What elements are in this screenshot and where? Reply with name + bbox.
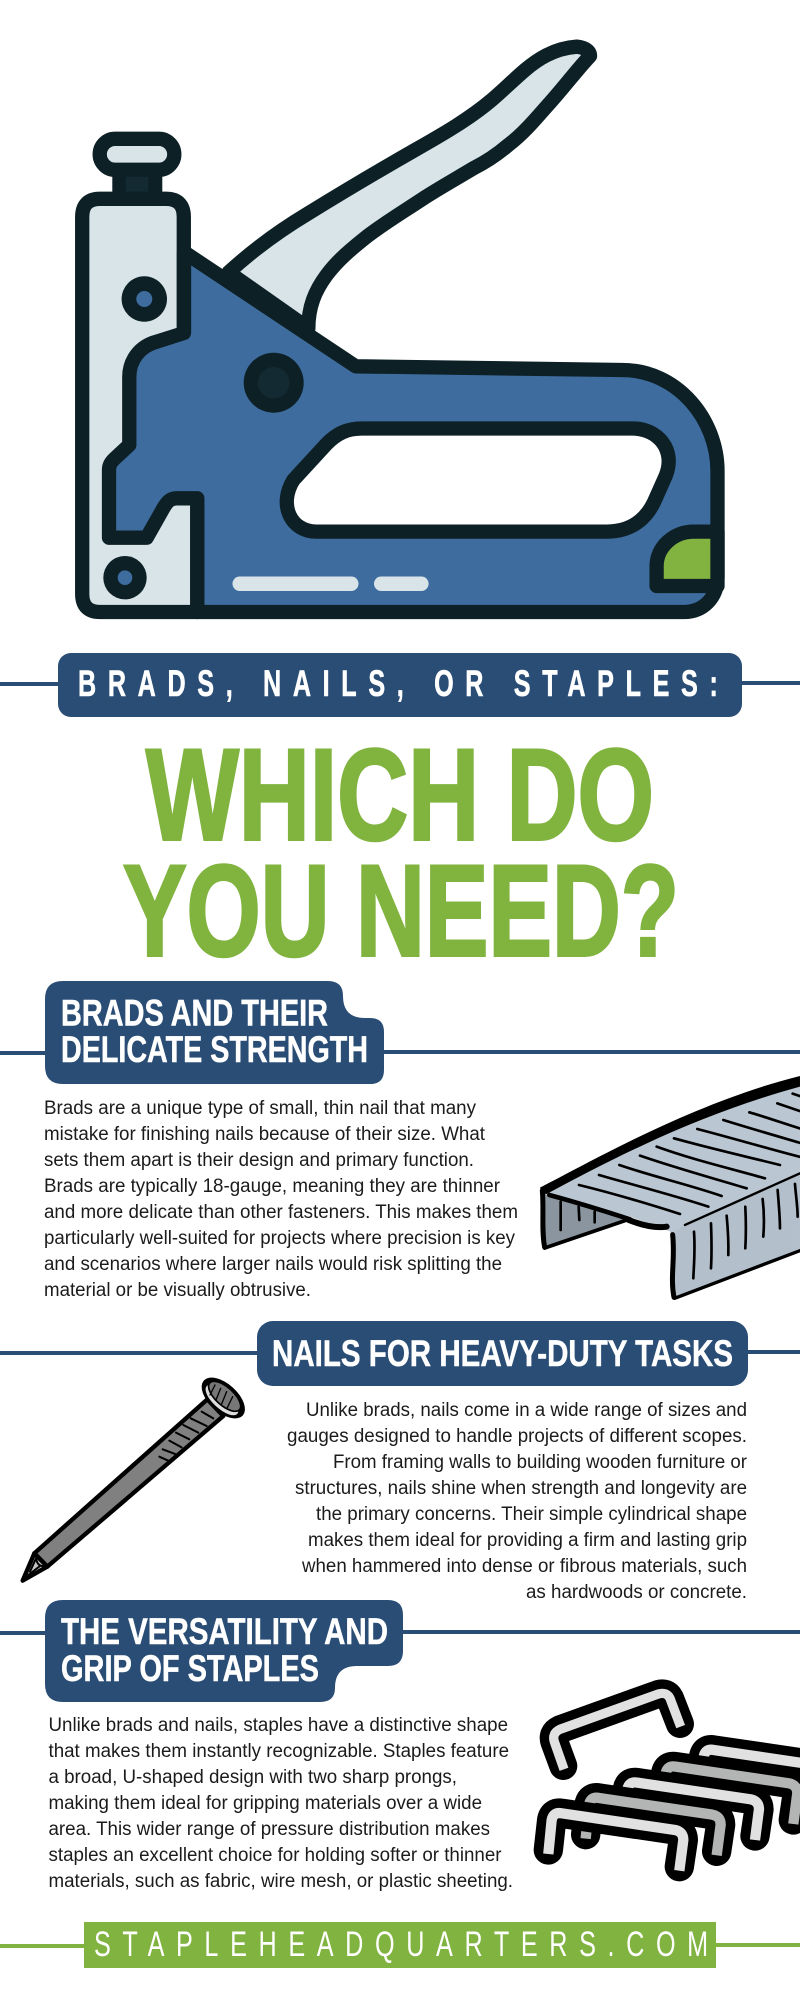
staples body text: Unlike brads and nails, staples have a distinctive shape [48,1715,508,1736]
nails heading [257,1321,748,1386]
nails body text: structures, nails shine when strength and longevity are [295,1478,747,1499]
staples body text: materials, such as fabric, wire mesh, or plastic sheeting. [48,1871,513,1892]
panel: brads [0,981,800,1301]
nails body text: makes them ideal for providing a firm and lasting grip [308,1530,747,1551]
brads body text: Brads are a unique type of small, thin nail that many [44,1098,476,1119]
stapler highlight pills [232,576,429,591]
panel: nails [0,1321,800,1603]
nails body text: gauges designed to handle projects of different scopes. [287,1426,747,1447]
stapler blue body [109,252,718,612]
staples body text [48,1715,513,1892]
title: WHICH DO [146,722,654,868]
banner: subtitle [0,653,800,717]
brads body text: mistake for finishing nails because of their size. What [44,1124,486,1145]
brads body text: sets them apart is their design and primary function. [44,1150,474,1171]
brads body text: Brads are typically 18-gauge, meaning they are thinner [44,1176,501,1197]
website text: STAPLEHEADQUARTERS.COM [94,1925,708,1964]
staples heading: GRIP OF STAPLES [61,1648,319,1689]
staples body text: a broad, U-shaped design with two sharp prongs, [48,1767,457,1788]
brads body text: and more delicate than other fasteners. This makes them [44,1202,518,1223]
brads heading: BRADS AND THEIR [61,992,328,1034]
stapler pivot [244,353,304,413]
row of staples [548,1750,800,1871]
brads heading [45,981,384,1084]
panel: staples [0,1600,800,1892]
staples body text: staples an excellent choice for holding softer or thinner [48,1845,502,1866]
brads body text: material or be visually obtrusive. [44,1280,311,1301]
staples heading [45,1600,403,1702]
nails body text: From framing walls to building wooden furniture or [333,1452,748,1473]
stapler knob [100,139,174,170]
icon: staples [548,1693,800,1871]
single loose staple [554,1693,681,1769]
stapler grip opening [287,428,669,532]
title [123,722,679,984]
nails body text: the primary concerns. Their simple cylindrical shape [316,1504,747,1525]
staples body text: that makes them instantly recognizable. Staples feature [48,1741,509,1762]
staples heading: THE VERSATILITY AND [61,1611,388,1652]
nails body text [287,1400,748,1603]
nails body text: as hardwoods or concrete. [526,1582,747,1603]
subtitle text: BRADS, NAILS, OR STAPLES: [78,662,718,704]
footer: website [0,1922,800,1968]
staples body text: making them ideal for gripping materials over a wide [48,1793,482,1814]
nails body text: Unlike brads, nails come in a wide range of sizes and [306,1400,747,1421]
icon: brad strip [540,1076,800,1298]
stapler lever handle [229,47,590,328]
brads body text [44,1098,518,1301]
brads body text: particularly well-suited for projects where precision is key [44,1228,515,1249]
stapler upper rivet [122,276,167,322]
staples body text: area. This wider range of pressure distribution makes [48,1819,490,1840]
stapler front column [82,199,197,612]
stapler green corner [657,532,718,586]
stapler neck [112,175,162,197]
nails body text: when hammered into dense or fibrous materials, such [301,1556,747,1577]
brads heading: DELICATE STRENGTH [61,1029,368,1070]
icon: stapler [82,47,717,612]
brads body text: and scenarios where larger nails would risk splitting the [44,1254,502,1275]
icon: nail [23,1370,252,1581]
stapler lower rivet [103,556,147,599]
